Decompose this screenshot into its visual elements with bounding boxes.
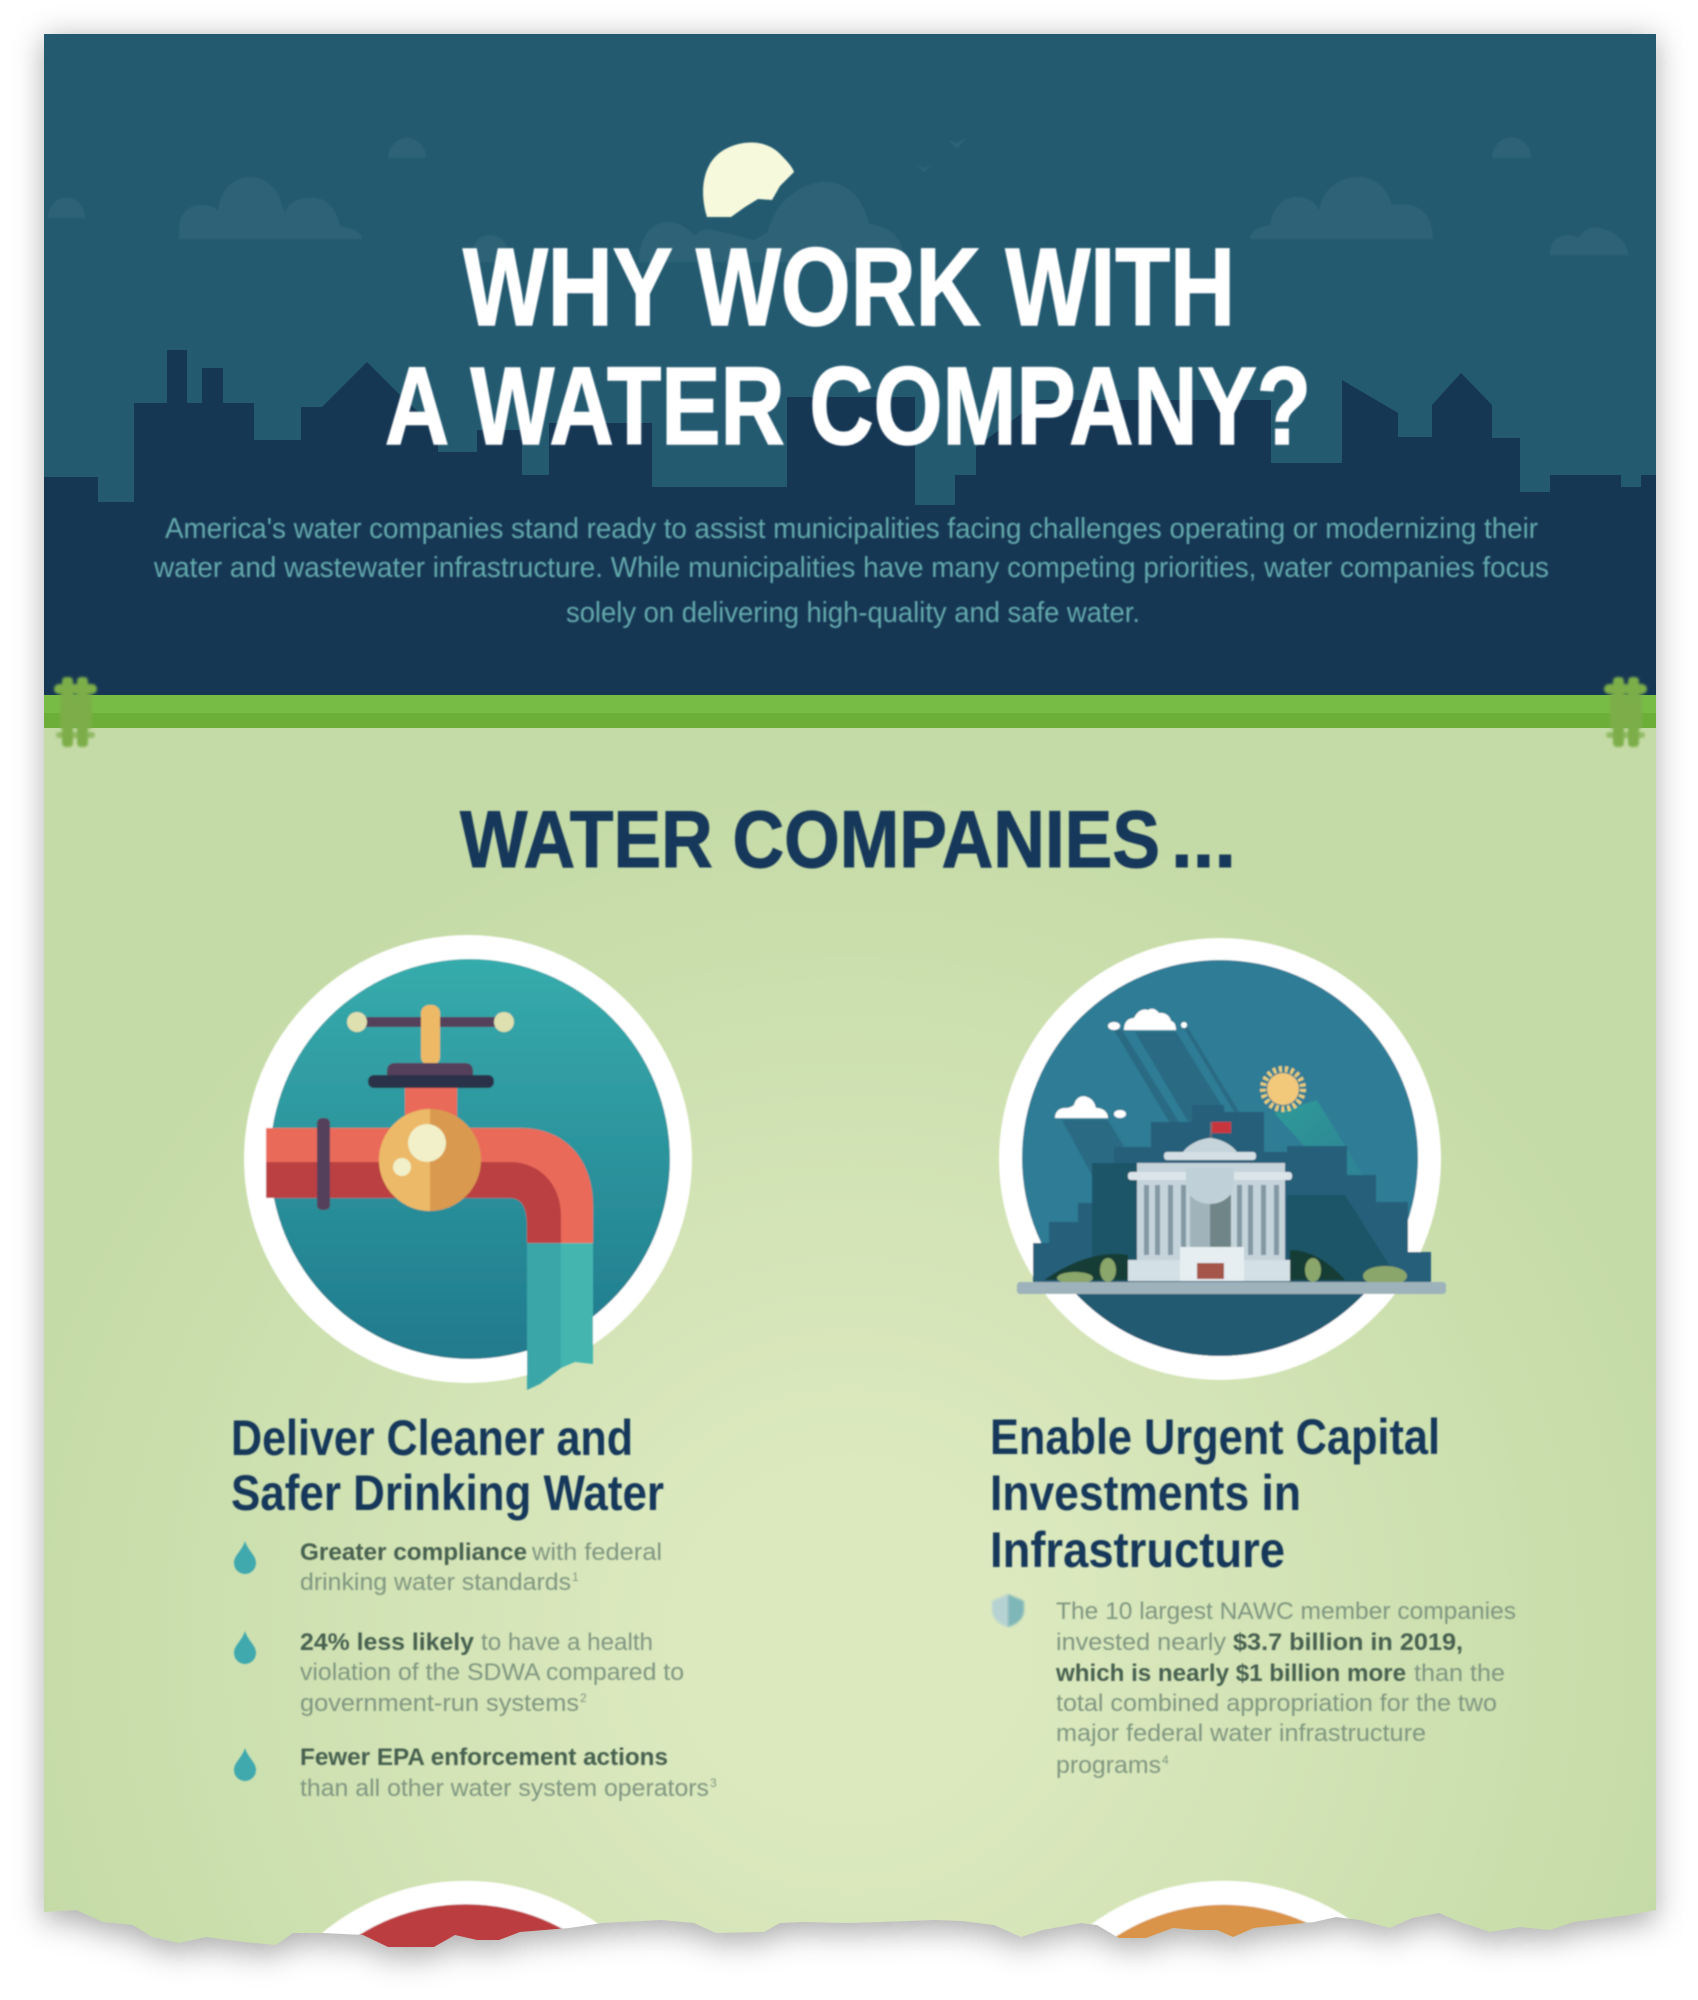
text: NAWC investment: The 10 largest NAWC member companies — [1056, 1598, 1516, 1625]
text: 24% less likely — [300, 1629, 684, 1717]
heading: enable urgent capital: Infrastructure — [990, 1522, 1285, 1578]
text: 24% less likely: 24% less likely — [300, 1629, 475, 1656]
ground — [1017, 1282, 1446, 1294]
panel: green content area — [44, 728, 1656, 1968]
text: NAWC investment: which is nearly $1 billion more — [1055, 1660, 1406, 1687]
text: greater compliance — [300, 1539, 662, 1596]
heading: deliver cleaner: Deliver Cleaner and — [231, 1410, 633, 1466]
heading: enable urgent capital: Investments in — [990, 1465, 1301, 1521]
icon: cut-off orange badge — [1090, 1880, 1350, 1938]
sun — [1263, 1069, 1303, 1109]
intro paragraph — [153, 513, 1549, 629]
main title: WHY WORK WITH — [463, 226, 1235, 349]
text: NAWC investment: invested nearly — [1056, 1629, 1226, 1656]
intro paragraph: solely on delivering high-quality and safe water. — [566, 597, 1140, 629]
icon: cut-off red badge — [321, 1880, 599, 1947]
icon: capitol building badge — [999, 938, 1446, 1380]
section heading — [458, 809, 1232, 870]
background clouds — [48, 137, 1628, 262]
text: NAWC investment: 4 — [1162, 1753, 1169, 1767]
icon: left pipe joint — [54, 677, 97, 747]
icon: water drop 2 — [234, 1631, 256, 1664]
text: fewer EPA actions: than all other water system operators — [300, 1775, 709, 1802]
text: greater compliance: Greater compliance — [300, 1539, 527, 1566]
text: fewer EPA actions: 3 — [710, 1776, 717, 1790]
panel: night sky header — [44, 34, 1656, 505]
text: greater compliance: 1 — [572, 1570, 579, 1584]
city skyline silhouette — [44, 350, 1656, 696]
section heading: ... — [1171, 795, 1236, 885]
text: 24% less likely: to have a health — [481, 1629, 653, 1656]
text: fewer EPA actions — [300, 1744, 717, 1802]
main title — [386, 246, 1308, 447]
text: 24% less likely: violation of the SDWA compared to — [300, 1659, 684, 1686]
section heading: WATER COMPANIES — [460, 795, 1160, 885]
icon: right pipe joint — [1604, 677, 1647, 747]
text: 24% less likely: 2 — [580, 1691, 587, 1705]
text: NAWC investment — [1055, 1598, 1516, 1779]
main title: A WATER COMPANY? — [385, 345, 1311, 468]
text: NAWC investment: $3.7 billion in 2019, — [1233, 1629, 1463, 1656]
text: fewer EPA actions: Fewer EPA enforcement actions — [300, 1744, 668, 1771]
icon: water drop 1 — [234, 1541, 256, 1574]
text: NAWC investment: total combined appropriation for the two — [1056, 1690, 1497, 1717]
intro paragraph: water and wastewater infrastructure. While municipalities have many competing priorities, water companies focus — [153, 552, 1549, 584]
icon: faucet badge — [244, 935, 692, 1390]
text: greater compliance: drinking water standards — [300, 1569, 571, 1596]
text: NAWC investment: major federal water infrastructure — [1056, 1720, 1426, 1747]
intro paragraph: America's water companies stand ready to assist municipalities facing challenges operating or modernizing their — [165, 513, 1538, 545]
heading: deliver cleaner: Safer Drinking Water — [231, 1465, 664, 1521]
icon: shield — [992, 1594, 1024, 1627]
icon: moon — [703, 142, 794, 217]
text: 24% less likely: government-run systems — [300, 1690, 579, 1717]
green pipe divider — [44, 695, 1656, 728]
text: NAWC investment: programs — [1056, 1752, 1161, 1779]
heading: enable urgent capital — [992, 1416, 1438, 1568]
heading: enable urgent capital: Enable Urgent Capital — [990, 1409, 1440, 1465]
icon: water drop 3 — [234, 1748, 256, 1781]
clouds — [1055, 1009, 1176, 1118]
building — [1212, 1122, 1231, 1133]
text: greater compliance: with federal — [531, 1539, 662, 1566]
heading: deliver cleaner — [231, 1410, 664, 1521]
text: NAWC investment: than the — [1414, 1660, 1505, 1687]
